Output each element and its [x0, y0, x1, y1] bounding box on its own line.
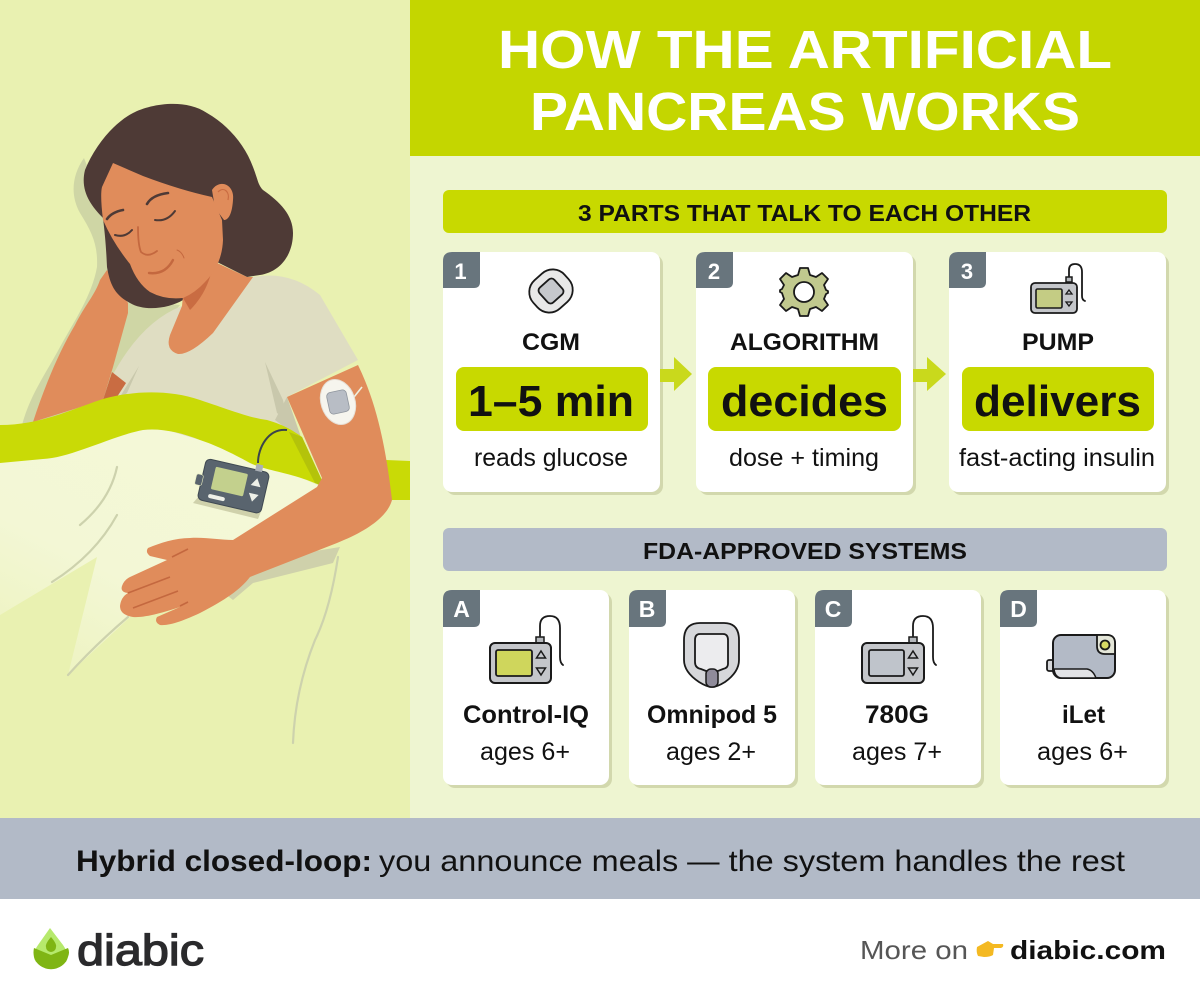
card 3: pump: PUMP	[1022, 329, 1094, 356]
value pill	[708, 367, 901, 431]
bed sheet	[0, 425, 322, 675]
card C: 780G: 780G	[865, 701, 929, 729]
badge 3: 3	[961, 259, 973, 284]
logo: diabic	[34, 926, 204, 975]
summary bar: you announce meals — the system handles the rest	[379, 845, 1126, 878]
card 1: CGM: reads glucose	[474, 444, 628, 472]
lower bed wrinkles	[52, 467, 338, 743]
title header	[410, 0, 1200, 156]
icon: pump	[1031, 264, 1085, 313]
card C: 780G	[815, 590, 984, 788]
icon: pump A	[490, 616, 563, 683]
raised forearm	[33, 270, 128, 422]
icon: pump C	[862, 616, 936, 683]
heading: FDA-approved systems: FDA-APPROVED SYSTEMS	[643, 538, 967, 564]
card B: Omnipod 5	[629, 590, 798, 788]
badge C	[815, 590, 852, 627]
badge D	[1000, 590, 1037, 627]
card 1: CGM: CGM	[522, 329, 580, 356]
hair	[84, 104, 293, 308]
icon: CGM sensor	[523, 263, 579, 319]
badge 2: 2	[708, 259, 720, 284]
badge 2	[696, 252, 733, 288]
summary bar	[0, 818, 1200, 899]
worn insulin pump	[191, 430, 287, 519]
card 3: pump: fast-acting insulin	[959, 444, 1155, 472]
heading: 3 parts: 3 PARTS THAT TALK TO EACH OTHER	[578, 200, 1031, 226]
badge 1: 1	[454, 259, 467, 284]
card A: Control-IQ	[443, 590, 612, 788]
blanket band	[0, 392, 325, 487]
summary bar: Hybrid closed-loop:	[76, 845, 372, 878]
neck	[169, 262, 253, 354]
card 2: algorithm: dose + timing	[729, 444, 879, 472]
icon: pointing hand	[977, 941, 1003, 957]
heading: FDA-approved systems	[443, 528, 1167, 571]
icon: gear	[780, 268, 828, 316]
badge C: C	[825, 596, 841, 622]
icon: Omnipod	[684, 623, 739, 687]
link: more on diabic.com: More on	[860, 935, 968, 965]
title header: HOW THE ARTIFICIAL	[498, 20, 1112, 80]
value pill	[456, 367, 648, 431]
badge B	[629, 590, 666, 627]
card 2: algorithm	[696, 252, 916, 495]
link: more on diabic.com	[860, 935, 1166, 965]
panel: sleeping woman illustration	[0, 0, 410, 818]
badge B: B	[639, 596, 655, 622]
arm sensor	[315, 375, 362, 429]
icon: iLet	[1047, 635, 1115, 678]
title header: PANCREAS WORKS	[530, 82, 1080, 142]
link: more on diabic.com: diabic.com	[1010, 935, 1166, 965]
face	[101, 163, 223, 298]
heading: 3 parts	[443, 190, 1167, 233]
logo: diabic: diabic	[77, 926, 204, 975]
value pill: 1–5 min	[468, 377, 634, 426]
card D: iLet	[1000, 590, 1169, 788]
facial features	[107, 193, 184, 273]
card 3: pump	[949, 252, 1169, 495]
card C: 780G: ages 7+	[852, 738, 942, 766]
card D: iLet: iLet	[1062, 701, 1106, 729]
value pill: decides	[721, 377, 888, 426]
panel: right content background	[410, 156, 1200, 818]
badge A	[443, 590, 480, 627]
head and arm shadow	[22, 158, 150, 425]
arrow: CGM to algorithm	[660, 357, 692, 391]
shirt	[110, 275, 358, 440]
icon: drop	[34, 928, 69, 969]
card A: Control-IQ: Control-IQ	[463, 701, 589, 729]
badge A: A	[453, 596, 470, 622]
badge 3	[949, 252, 986, 288]
ear	[212, 184, 233, 220]
card 2: algorithm: ALGORITHM	[730, 329, 879, 356]
badge D: D	[1010, 596, 1027, 622]
card 1: CGM	[443, 252, 663, 495]
value pill	[962, 367, 1154, 431]
card B: Omnipod 5: ages 2+	[666, 738, 756, 766]
card A: Control-IQ: ages 6+	[480, 738, 570, 766]
badge 1	[443, 252, 480, 288]
lower arm and hand	[120, 365, 392, 625]
card D: iLet: ages 6+	[1037, 738, 1128, 766]
arrow: algorithm to pump	[913, 357, 946, 391]
value pill: delivers	[974, 377, 1141, 426]
card B: Omnipod 5: Omnipod 5	[647, 701, 777, 729]
